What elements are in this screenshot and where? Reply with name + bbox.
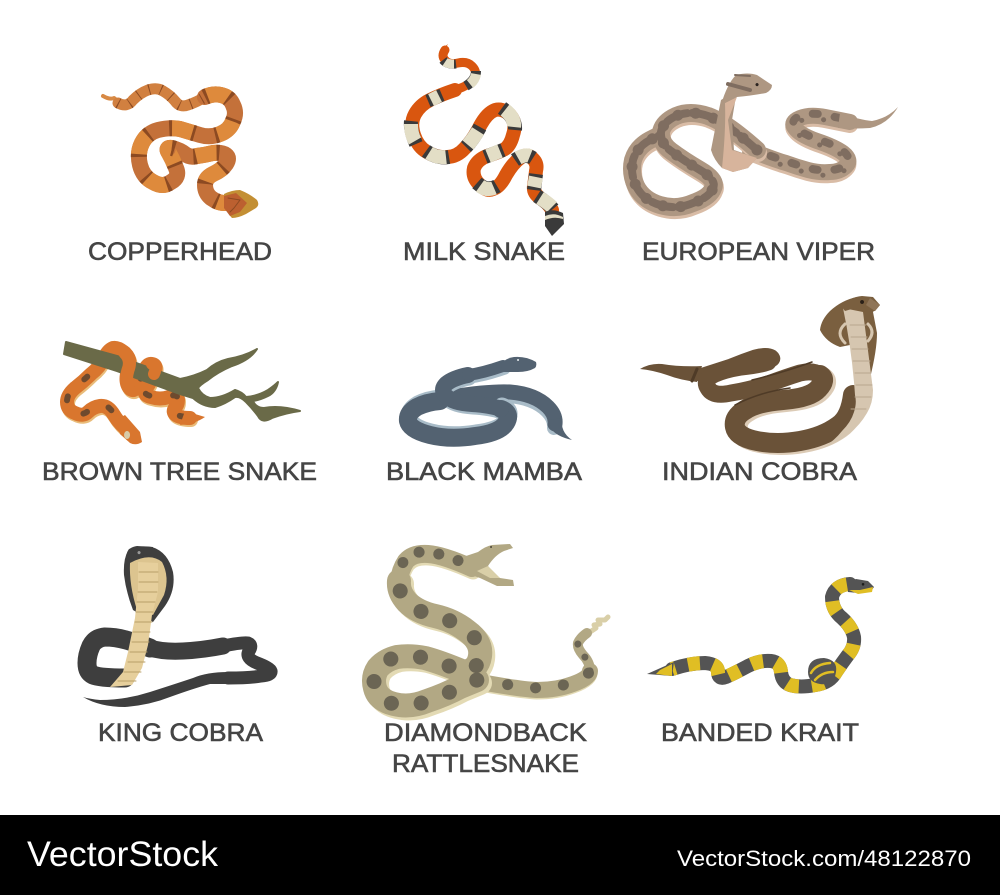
- panel: indian cobra: [640, 296, 880, 486]
- illustration: brown tree snake on branch: [64, 342, 300, 444]
- panel: copperhead: [88, 89, 272, 266]
- label: DIAMONDBACK: [384, 719, 587, 747]
- label: EUROPEAN VIPER: [642, 238, 875, 266]
- panel: banded krait: [647, 579, 874, 747]
- illustration: king cobra: [83, 546, 271, 707]
- panel: milk snake: [403, 44, 565, 266]
- label: BANDED KRAIT: [661, 719, 859, 747]
- panel: diamondback rattlesnake: [374, 544, 608, 778]
- illustration: milk snake: [411, 44, 564, 236]
- label: INDIAN COBRA: [662, 458, 857, 486]
- panel: european viper: [632, 74, 898, 266]
- image url: VectorStock.com/48122870: [677, 846, 971, 871]
- panel: brown tree snake: [42, 342, 317, 486]
- label: RATTLESNAKE: [392, 750, 579, 778]
- illustration: diamondback rattlesnake: [374, 544, 608, 708]
- illustration: black mamba: [408, 357, 572, 440]
- label: BLACK MAMBA: [386, 458, 582, 486]
- footer bar: [0, 815, 1000, 895]
- black rings: [411, 60, 553, 209]
- panel: king cobra: [83, 546, 271, 747]
- illustration: european viper: [632, 74, 898, 210]
- label: BROWN TREE SNAKE: [42, 458, 317, 486]
- brand wordmark: VectorStock: [27, 835, 219, 874]
- illustration: copperhead snake: [103, 89, 258, 218]
- illustration: banded krait: [647, 579, 874, 686]
- label: KING COBRA: [98, 719, 263, 747]
- label: COPPERHEAD: [88, 238, 272, 266]
- illustration: indian cobra: [640, 296, 880, 448]
- label: MILK SNAKE: [403, 238, 565, 266]
- cream rings: [411, 62, 552, 207]
- panel: black mamba: [386, 357, 582, 486]
